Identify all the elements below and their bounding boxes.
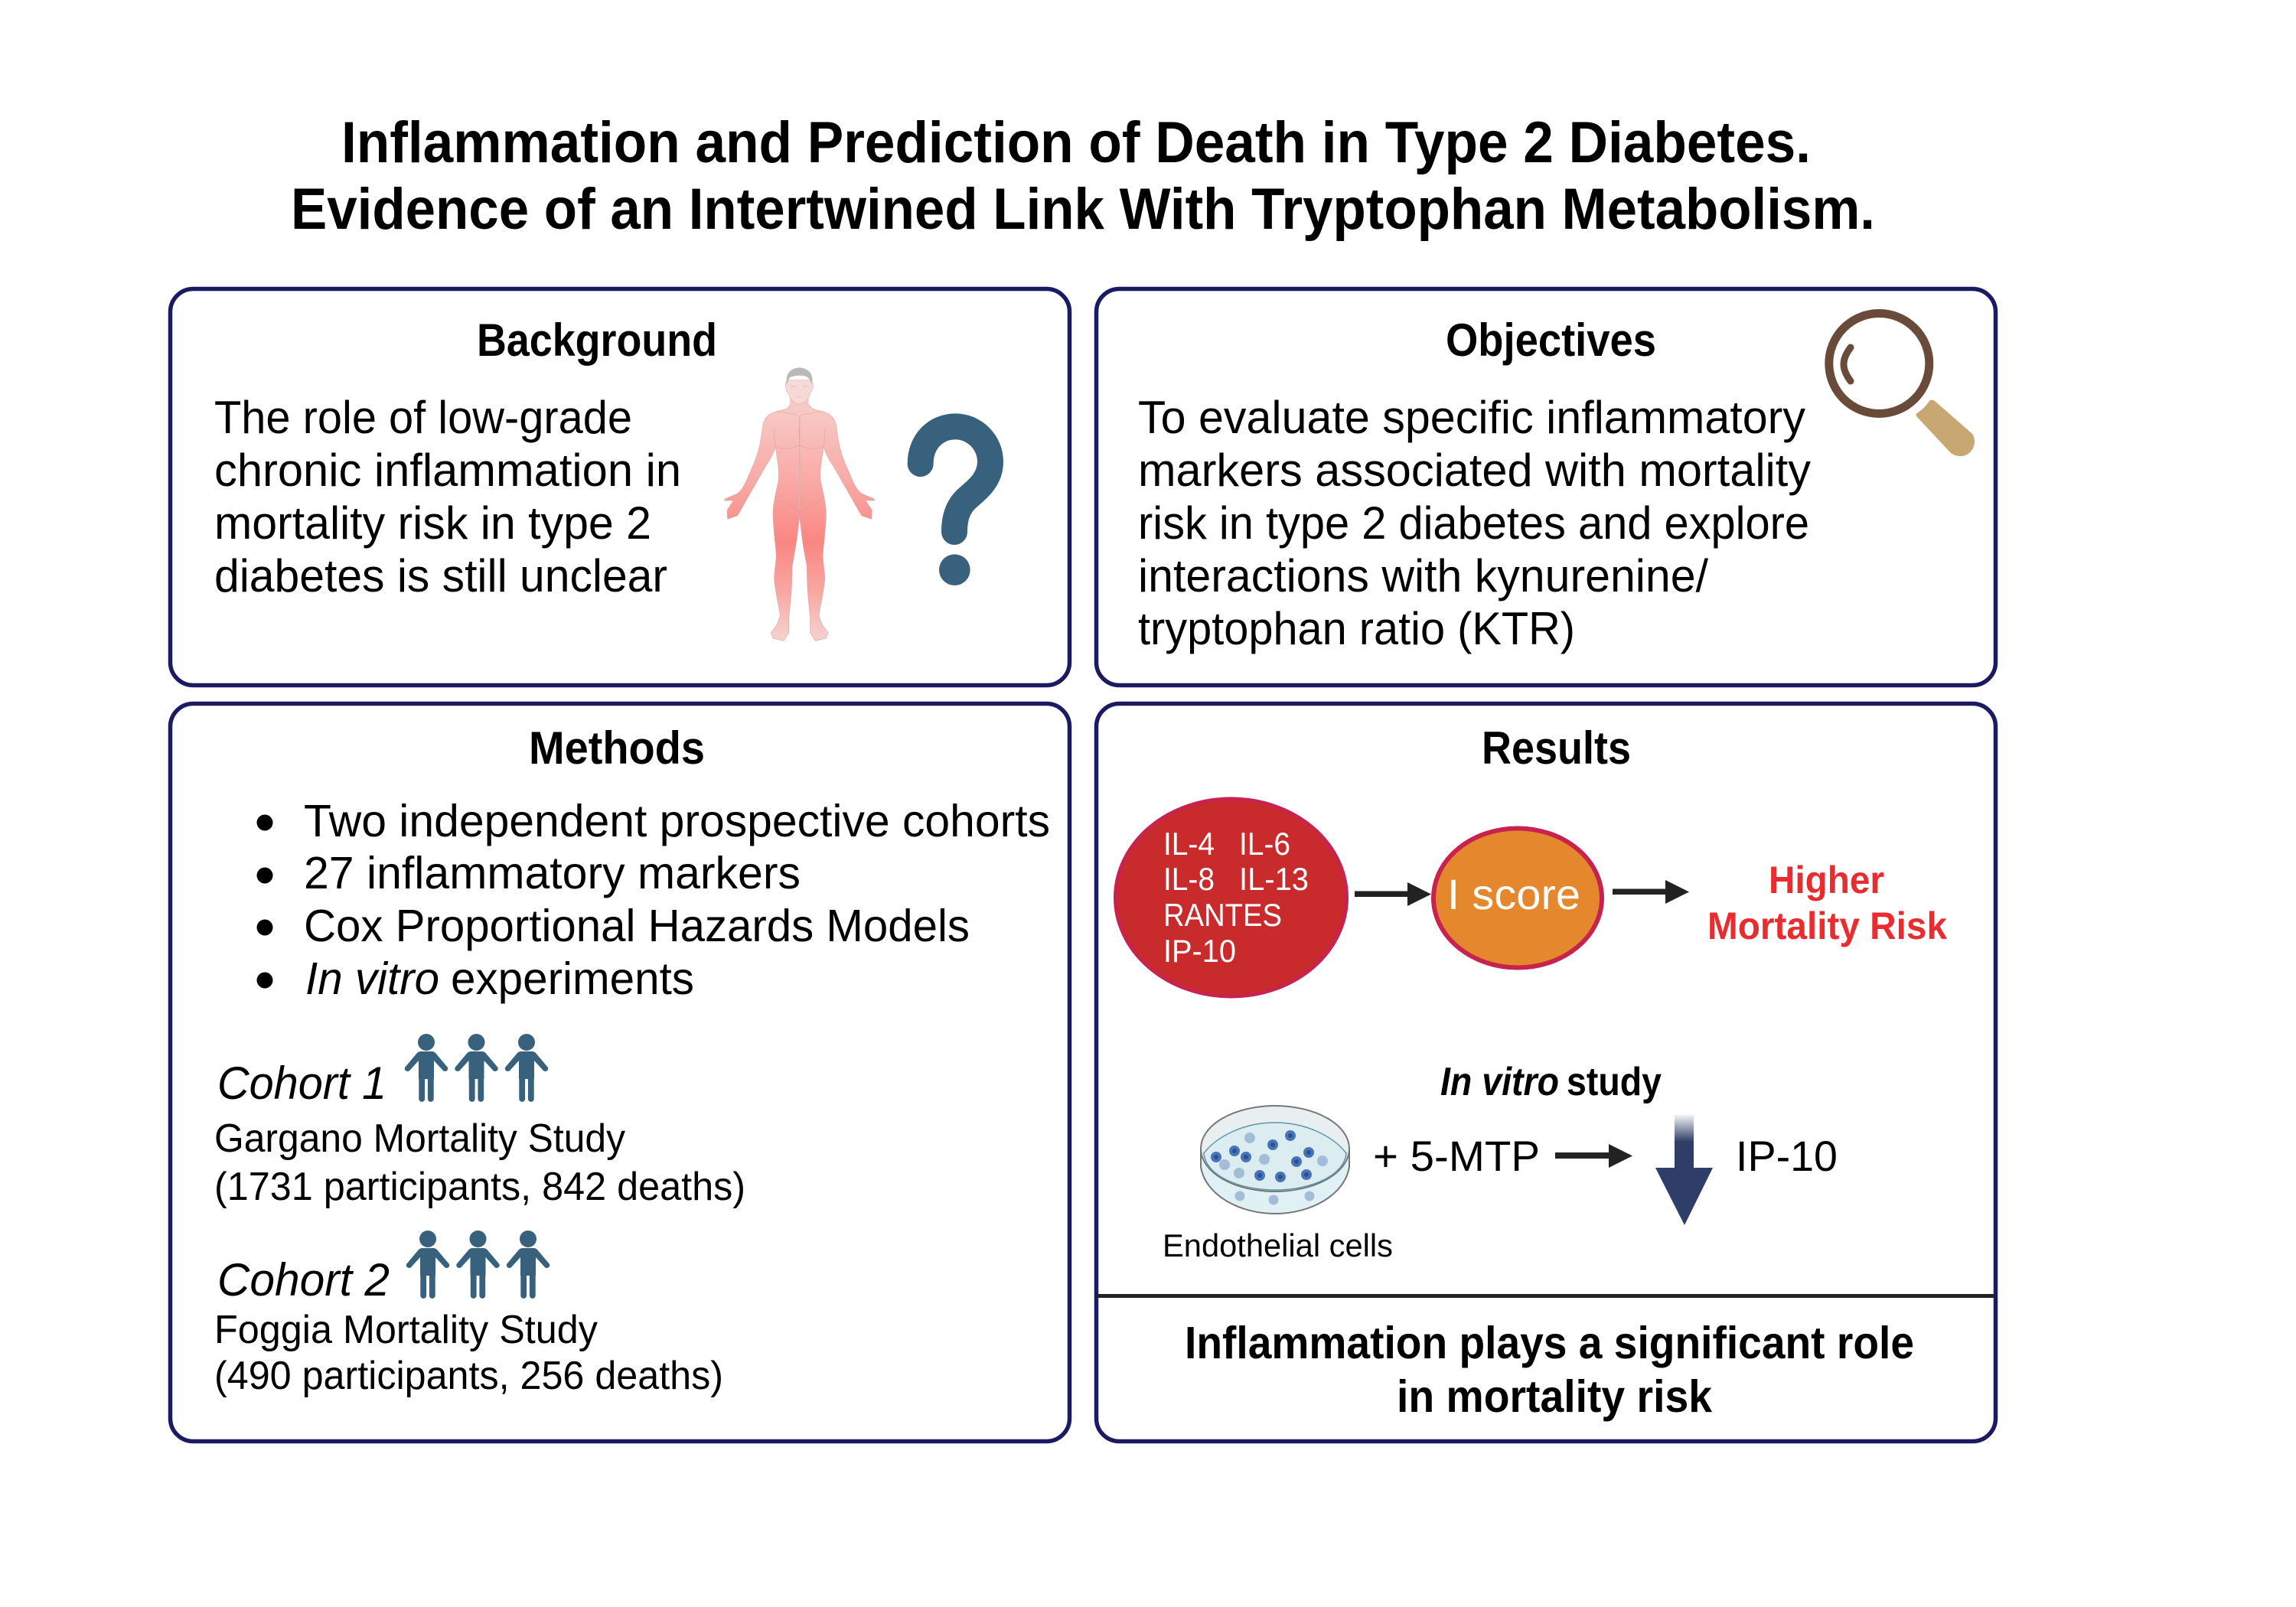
background text: mortality risk in type 2 (214, 497, 651, 549)
icon: human body (725, 367, 875, 641)
cohort 2 details: Foggia Mortality Study (214, 1308, 598, 1352)
background text: The role of low-grade (214, 392, 632, 443)
panel: objectives (1096, 289, 1996, 686)
title (291, 110, 1875, 242)
conclusion: Inflammation plays a significant role (1185, 1318, 1914, 1368)
heading: background: Background (477, 315, 717, 366)
cohort 1 label: Cohort 1 (217, 1058, 386, 1109)
bullet list: In vitro (305, 953, 439, 1004)
icon: cohort 2 people (406, 1231, 550, 1296)
inflammatory markers circle: IL-13 (1239, 861, 1309, 897)
heading: methods: Methods (529, 722, 705, 774)
5-MTP label: + 5-MTP (1373, 1132, 1540, 1180)
inflammatory markers circle: IL-8 (1163, 861, 1215, 897)
objectives text: tryptophan ratio (KTR) (1138, 603, 1575, 654)
objectives text: risk in type 2 diabetes and explore (1138, 497, 1809, 549)
bullet list: Two independent prospective cohorts (304, 796, 1050, 846)
heading: results: Results (1482, 722, 1631, 774)
panel: results (1096, 704, 1996, 1442)
IP-10 label: IP-10 (1736, 1132, 1838, 1180)
higher mortality risk: Mortality Risk (1707, 905, 1947, 947)
objectives text: To evaluate specific inflammatory (1138, 392, 1805, 443)
arrow: I score to risk (1613, 880, 1689, 904)
cohort 2 details (214, 1308, 723, 1398)
background text: chronic inflammation in (214, 445, 681, 496)
inflammatory markers circle (1116, 799, 1347, 996)
bullet list: Cox Proportional Hazards Models (304, 901, 970, 951)
heading: objectives: Objectives (1446, 315, 1656, 366)
conclusion (1185, 1318, 1914, 1422)
endothelial cells label: Endothelial cells (1163, 1227, 1393, 1263)
arrow: 5-MTP (1555, 1144, 1632, 1168)
I score circle (1433, 828, 1602, 967)
title: Inflammation and Prediction of Death in Type 2 Diabetes. (341, 110, 1811, 175)
background text: diabetes is still unclear (214, 550, 667, 601)
inflammatory markers circle: IP-10 (1163, 933, 1236, 969)
cohort 2 details: (490 participants, 256 deaths) (214, 1354, 723, 1398)
icon: petri dish (1201, 1106, 1349, 1214)
arrow: IP-10 decrease (1655, 1113, 1713, 1225)
icon: magnifying glass (1829, 314, 1975, 456)
inflammatory markers circle: RANTES (1163, 897, 1282, 933)
title: Evidence of an Intertwined Link With Tryptophan Metabolism. (291, 177, 1875, 242)
I score circle: I score (1447, 870, 1580, 918)
bullet list: 27 inflammatory markers (304, 848, 801, 898)
in vitro heading (1440, 1060, 1662, 1104)
objectives text: interactions with kynurenine/ (1138, 550, 1708, 601)
bullet list (257, 796, 1050, 1004)
cohort 2 label: Cohort 2 (217, 1254, 390, 1305)
objectives text (1138, 392, 1811, 654)
background text (214, 392, 681, 601)
arrow: markers to I score (1355, 882, 1431, 906)
in vitro heading: study (1567, 1060, 1662, 1104)
icon: question mark (921, 426, 990, 585)
objectives text: markers associated with mortality (1138, 445, 1811, 496)
inflammatory markers circle: IL-4 (1163, 826, 1215, 862)
inflammatory markers circle: IL-6 (1239, 826, 1290, 862)
bullet list: experiments (451, 953, 694, 1004)
icon: cohort 1 people (405, 1034, 548, 1099)
cohort 1 details (214, 1116, 745, 1209)
divider (1096, 1294, 1995, 1298)
conclusion: in mortality risk (1397, 1371, 1712, 1422)
in vitro heading: In vitro (1440, 1060, 1559, 1104)
higher mortality risk: Higher (1769, 859, 1884, 901)
cohort 1 details: Gargano Mortality Study (214, 1116, 625, 1161)
cohort 1 details: (1731 participants, 842 deaths) (214, 1165, 745, 1209)
panel: background (170, 289, 1070, 686)
panel: methods (170, 704, 1070, 1442)
higher mortality risk (1707, 859, 1947, 947)
